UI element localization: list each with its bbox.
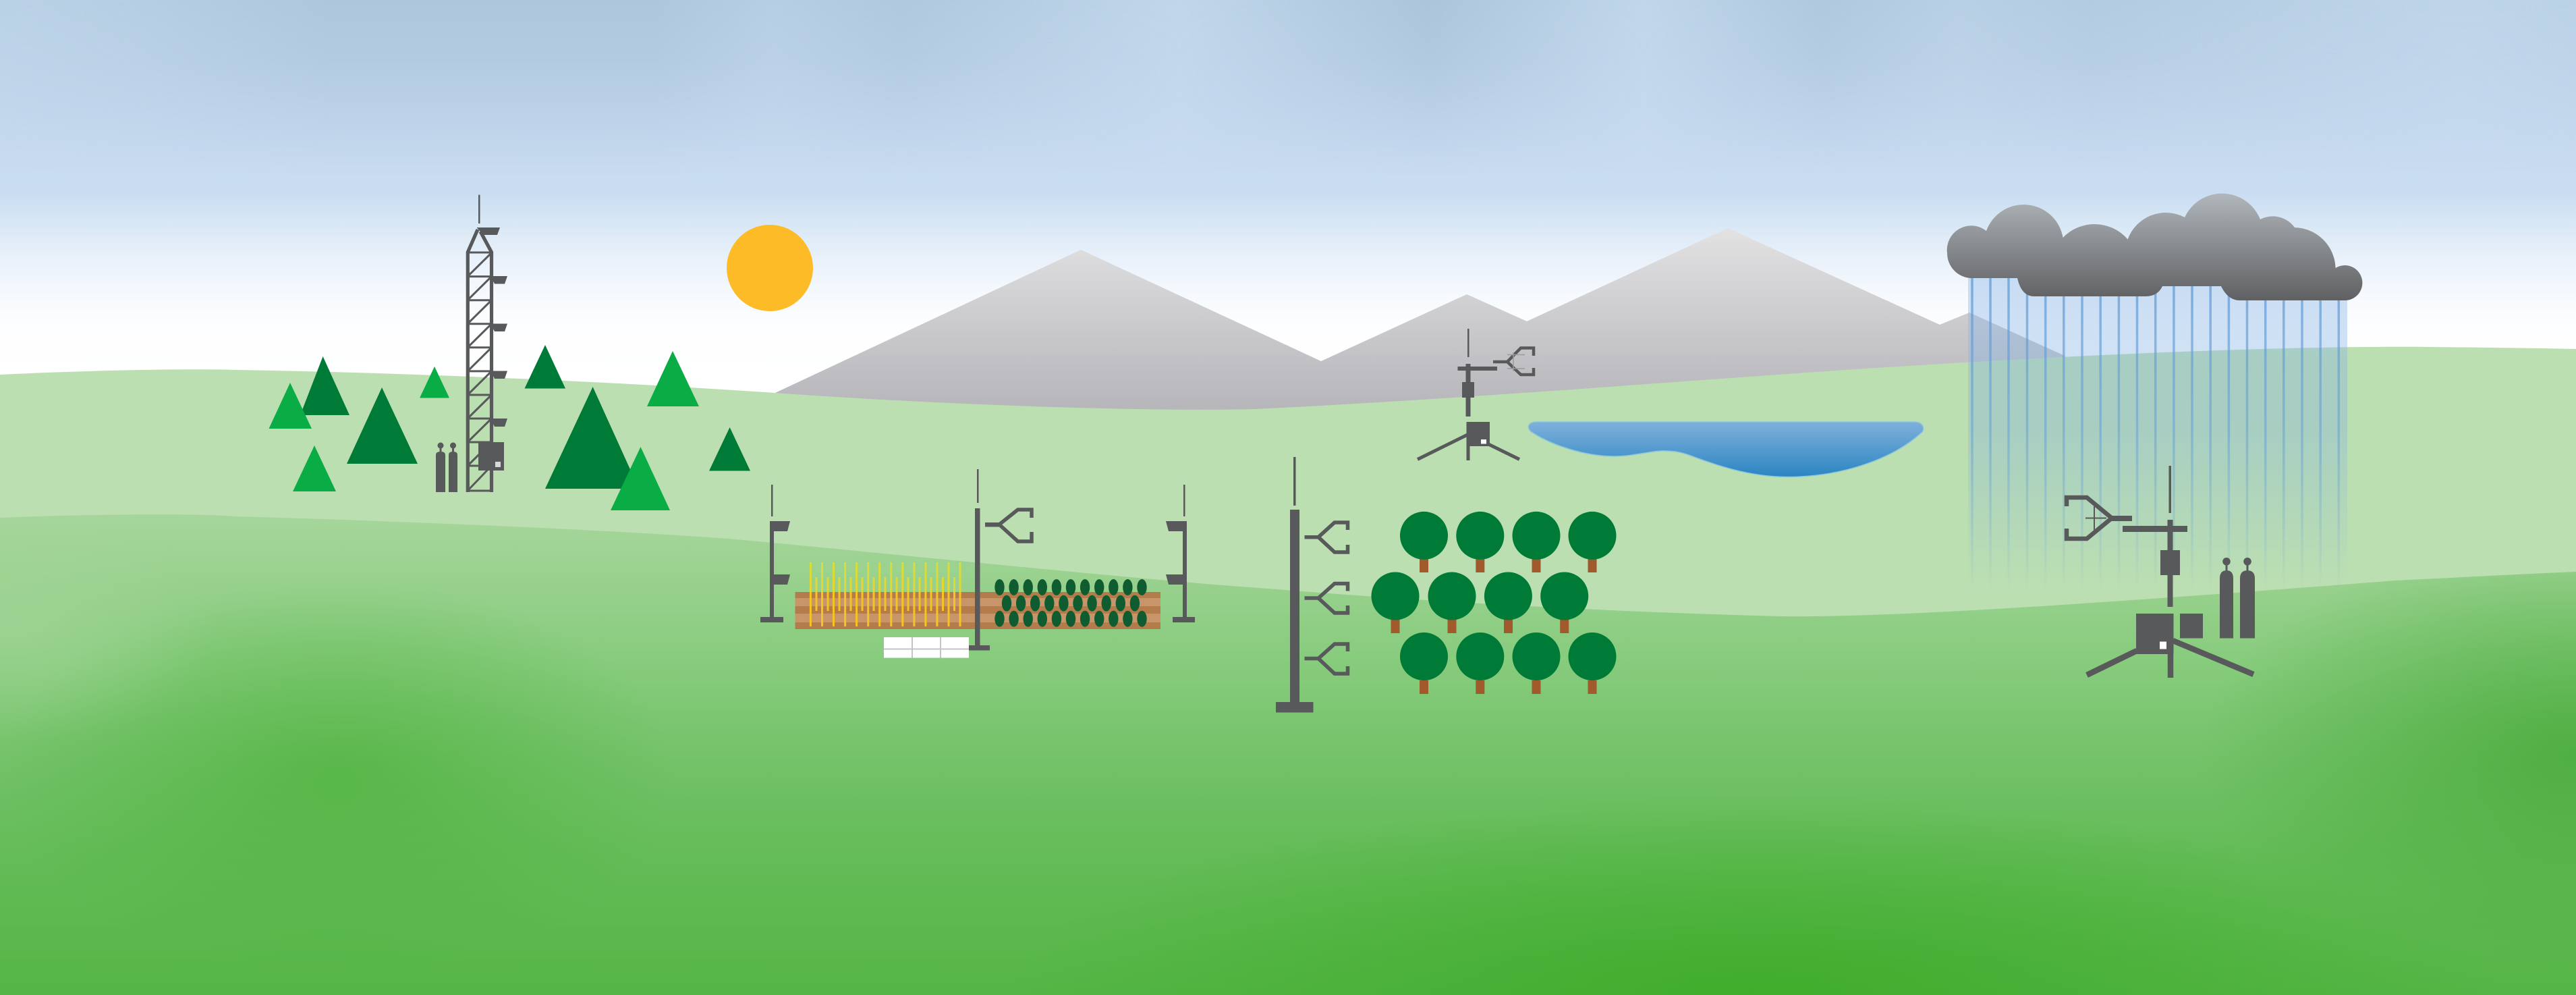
crop field — [795, 562, 1160, 657]
sonic fork — [2067, 498, 2112, 539]
tower legs — [468, 230, 491, 492]
analyser box — [1462, 382, 1474, 398]
pole — [975, 508, 980, 647]
sensors — [770, 521, 790, 585]
tripod — [1418, 422, 1519, 460]
tree — [647, 351, 699, 406]
sonic arm — [985, 522, 1001, 527]
short crop stems — [816, 577, 954, 611]
lake — [1528, 422, 1924, 477]
antenna — [1293, 457, 1295, 506]
sonic fork — [999, 510, 1032, 541]
base — [969, 645, 990, 651]
mountains — [775, 228, 2065, 432]
tower lattice — [468, 252, 491, 491]
tree — [611, 447, 670, 510]
tree — [269, 383, 312, 429]
soil stripes — [795, 592, 1160, 629]
middle field pole with sonic anemometer — [969, 469, 1032, 651]
forest tree triangles — [269, 345, 750, 510]
pole — [1290, 510, 1299, 702]
left field stand — [760, 485, 790, 622]
crowns — [1371, 512, 1617, 680]
lower sonic — [1305, 644, 1348, 674]
cylinder valves — [2222, 558, 2251, 566]
sun — [727, 225, 813, 311]
middle sonic — [1305, 583, 1348, 613]
tree — [300, 356, 349, 415]
lake station — [1418, 329, 1534, 460]
mast — [2167, 520, 2173, 607]
rain band — [1968, 270, 2347, 591]
base — [760, 617, 783, 622]
gas cylinders — [436, 446, 457, 492]
lattice flux tower — [436, 195, 507, 492]
sonic inner lines — [2085, 506, 2106, 530]
mast — [1465, 364, 1471, 416]
pole — [1183, 521, 1187, 620]
tree — [709, 427, 750, 471]
logger window — [2160, 641, 2166, 649]
logger box — [2136, 614, 2174, 654]
rain — [1968, 270, 2347, 591]
crossbar — [2123, 526, 2187, 532]
antenna — [1467, 329, 1469, 357]
logger window — [1481, 439, 1486, 444]
tower antenna — [478, 195, 480, 223]
tree — [347, 387, 418, 464]
tree — [525, 345, 565, 389]
sonic inner lines — [1507, 352, 1525, 371]
logger window — [495, 462, 501, 467]
rain station — [2067, 466, 2255, 678]
right field stand — [1166, 485, 1195, 622]
back hill — [0, 347, 2576, 995]
trunks — [1391, 559, 1596, 694]
tower sensor flags — [476, 227, 507, 427]
tripod — [2087, 635, 2253, 678]
tree — [293, 446, 336, 491]
logger box — [1467, 422, 1490, 446]
base — [1173, 617, 1195, 622]
sensors — [1166, 521, 1187, 585]
second box — [2180, 614, 2203, 639]
orchard tree stand — [1276, 457, 1348, 713]
base — [1276, 702, 1313, 713]
sky background — [0, 0, 2576, 301]
pole — [770, 521, 774, 620]
antenna — [1183, 485, 1185, 516]
dark green plants — [995, 579, 1147, 627]
cylinder valves — [438, 443, 456, 448]
front hill — [0, 513, 2576, 995]
orchard trees — [1371, 512, 1617, 694]
gas cylinders — [2220, 562, 2255, 639]
tower logger box — [478, 442, 504, 470]
sonic — [1493, 348, 1534, 375]
tall crop stems — [810, 562, 960, 626]
crossbar — [1457, 367, 1497, 371]
antenna — [771, 485, 773, 516]
sonic arm — [2110, 516, 2132, 521]
upper sonic — [1305, 522, 1348, 552]
rain lines — [1972, 273, 2339, 591]
antenna — [2168, 466, 2171, 513]
cloud — [1947, 194, 2362, 300]
solar panel — [884, 637, 969, 657]
antenna — [977, 469, 978, 503]
tree — [545, 387, 639, 489]
analyser box — [2160, 550, 2180, 575]
tree — [420, 367, 449, 398]
